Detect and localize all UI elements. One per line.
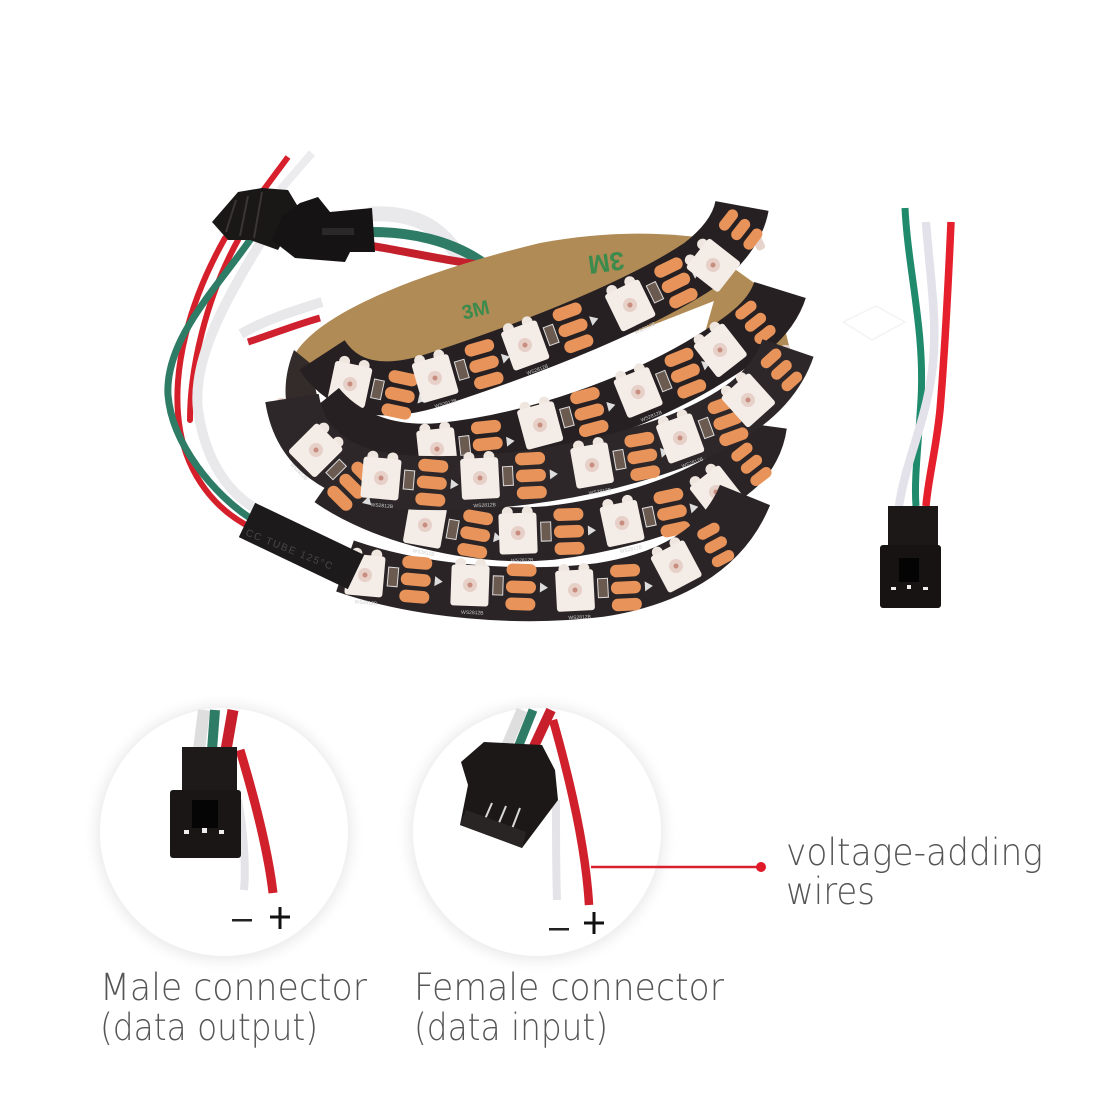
wires	[199, 710, 273, 893]
tape print: 3M	[586, 245, 626, 280]
strip row 3	[281, 342, 804, 527]
panel: LED strip photo	[168, 153, 804, 622]
strip row 4	[330, 425, 774, 569]
leader line	[591, 866, 760, 868]
icon: joined plug and socket connector	[212, 188, 375, 262]
plus sign	[270, 907, 290, 929]
plus sign	[584, 912, 604, 934]
heat-shrink tube with print	[244, 520, 356, 573]
wires: red, green and white loop on the left	[168, 238, 262, 528]
panel: female connector close-up	[410, 706, 725, 1049]
adhesive tape backing: 3M	[460, 297, 492, 325]
panel: separate male connector pigtail	[843, 208, 951, 608]
caption: (data input)	[414, 1006, 608, 1049]
leader dot	[756, 862, 766, 872]
callout text: voltage-adding	[786, 831, 1043, 874]
caption: (data output)	[100, 1006, 318, 1049]
LED side tabs at the strip edges	[277, 224, 790, 535]
adhesive tape backing	[286, 234, 790, 455]
wires: right-hand pigtail running behind the reel	[372, 214, 505, 268]
strip row 2	[318, 290, 780, 482]
minus sign	[549, 928, 569, 930]
circle shadow	[97, 706, 351, 960]
circle shadow	[410, 706, 664, 960]
panel: male connector close-up	[97, 706, 368, 1049]
caption: Female connector	[414, 966, 725, 1009]
strip row 1	[322, 204, 765, 431]
icon: male connector plug	[880, 506, 941, 608]
callout text: wires	[786, 870, 875, 913]
circle	[413, 708, 661, 956]
minus sign	[232, 919, 252, 922]
icon: female socket	[460, 742, 558, 848]
wires	[505, 710, 589, 905]
faint watermark diamond	[843, 306, 905, 340]
callout: voltage-adding wires	[591, 831, 1043, 913]
icon: male plug	[170, 747, 241, 858]
strip row 5	[343, 495, 745, 622]
caption: Male connector	[100, 966, 368, 1009]
heat-shrink tube with print: CC TUBE 125°C	[244, 528, 335, 573]
circle	[100, 708, 348, 956]
wire ends above connector	[262, 153, 312, 192]
wires: green, white, red	[899, 208, 951, 506]
wire stubs near the reel	[241, 302, 322, 342]
